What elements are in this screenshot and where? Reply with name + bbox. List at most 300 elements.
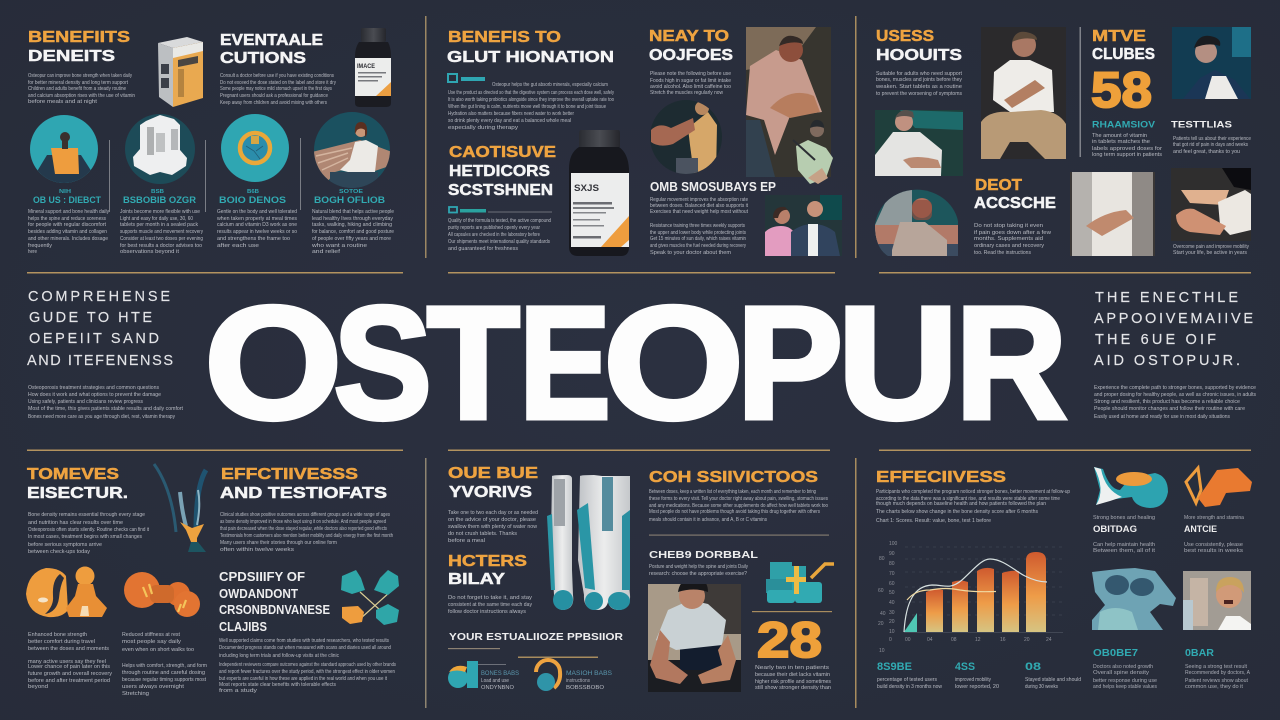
icon: large supplement bottle bbox=[569, 130, 629, 256]
text: oue bue body: before a meal bbox=[448, 538, 485, 544]
panel: effectiveness chart bbox=[876, 467, 1252, 690]
photo: man in green shirt bbox=[793, 120, 833, 184]
chart axis labels: 20 bbox=[878, 621, 884, 627]
heading: neay to oojfoes: NEAY TO bbox=[649, 28, 729, 45]
text: obitdag: Between them, all of it bbox=[1093, 548, 1155, 554]
text: column two: observations beyond it bbox=[120, 249, 179, 255]
panel: side effects and usage bbox=[448, 465, 834, 692]
text: effctiivesss body bbox=[220, 512, 393, 553]
stats under chart: improved mobility bbox=[955, 677, 991, 683]
text: neay body bbox=[650, 71, 731, 96]
photo: man holding his back bbox=[746, 27, 831, 177]
text: obare: Doctors also noted growth bbox=[1093, 664, 1153, 670]
icon: teal and white brushes bbox=[547, 475, 630, 610]
heading: mtve clubes: MTVE bbox=[1092, 28, 1146, 45]
text: head icon caption: ONDYNBNO bbox=[481, 685, 514, 691]
text: left intro body: Bones need more care as you age through diet, rest, vitamin therapy bbox=[28, 414, 175, 420]
chart axis labels: 12 bbox=[975, 637, 981, 643]
icon: back pain circle bbox=[30, 115, 98, 190]
chart axis labels: 70 bbox=[889, 571, 895, 577]
photo: man in dark jacket bbox=[1172, 27, 1251, 99]
text: column one: OB US : DIEBCT bbox=[33, 195, 101, 206]
photo: woman in circle frame bbox=[875, 186, 959, 258]
text: caotisuve body: and guaranteed for freshness bbox=[448, 246, 518, 252]
text: omb body: Exercises that need weight help most without bbox=[650, 209, 748, 215]
text: effctiivesss body: often within twelve weeks bbox=[220, 547, 294, 553]
text: effectiveness body: The charts below show change in the bone density score after 6 months bbox=[876, 509, 1038, 515]
text: omb body: and gives muscles the fuel needed during recovery bbox=[650, 243, 746, 249]
heading: benefis to glut hionation: BENEFIS TO bbox=[448, 29, 561, 46]
stat: 58: 58 bbox=[1091, 62, 1152, 118]
rule bbox=[649, 534, 829, 536]
subheading: teal label: RHAAMSIOV bbox=[1092, 120, 1156, 130]
text: tomeves body: and nutrition has clear results over time bbox=[28, 520, 123, 526]
intro text: right: AID OSTOPUJR. bbox=[1094, 353, 1240, 369]
photo: woman in circle bbox=[312, 112, 392, 188]
text: effectiveness body: Participants who completed the program noticed stronger bones, better movement at follow-up bbox=[876, 489, 1070, 495]
text: 28 body bbox=[755, 665, 831, 691]
text: oue bue body: swallow them with plenty of water now bbox=[448, 524, 538, 530]
chart axis labels bbox=[878, 541, 1052, 654]
chart axis labels: 20 bbox=[889, 619, 895, 625]
text: column one: besides adding vitamin and collagen bbox=[28, 229, 107, 235]
text: testtlias body: Patients tell us about their experience bbox=[1173, 136, 1251, 142]
chart axis labels: 40 bbox=[889, 600, 895, 606]
text: cpdsiiify body: from a study bbox=[219, 688, 257, 694]
text: antcie bbox=[1184, 515, 1245, 554]
text: omb body: between doses. Balanced diet also supports it bbox=[650, 203, 748, 209]
photo: hands and forearm bbox=[1171, 168, 1251, 241]
text: obare: better response during use bbox=[1093, 678, 1157, 684]
text: tomeves body: Bone density remains essential through every stage bbox=[28, 512, 145, 518]
text: column two bbox=[120, 189, 203, 255]
text: cpdsiiify body: Most reports state clear benefits with tolerable effects bbox=[219, 682, 336, 688]
text: glut body: Use the product as directed so that the digestive system can process each dose well, safely bbox=[448, 90, 614, 96]
heading: usess hoouits bbox=[876, 28, 962, 64]
heading: deot accsche bbox=[974, 177, 1056, 212]
text: column four: BOGH OFLIOB bbox=[314, 195, 385, 206]
text: column one: for people with regular discomfort bbox=[28, 222, 106, 228]
text: deot body: ordinary cases and recovery bbox=[974, 243, 1044, 249]
heading: benefits bbox=[28, 29, 130, 65]
subheading: cpdsiiify of ondandont: CLAJIBS bbox=[219, 620, 267, 634]
text: deot body: Do not stop taking it even bbox=[974, 223, 1043, 229]
text: oue bue body: Take one to two each day or as needed bbox=[448, 510, 538, 516]
stats under chart: percentage of tested users bbox=[877, 677, 937, 683]
heading: eventaale cutions: EVENTAALE bbox=[220, 32, 323, 49]
title: OSTEOPUR: P bbox=[737, 273, 843, 452]
chart axis labels: 90 bbox=[889, 551, 895, 557]
text: glut body bbox=[448, 82, 614, 131]
text: oue bue body bbox=[448, 510, 538, 544]
text: column four: SOTOE bbox=[339, 189, 363, 195]
photo: two people in a circle bbox=[650, 100, 722, 175]
icon: product box bbox=[158, 37, 203, 107]
intro text: right bbox=[1094, 290, 1253, 369]
text: head icon caption bbox=[481, 670, 520, 691]
subheading: your estualiioze ppbsiior: YOUR ESTUALIIOZE PPBSIIOR bbox=[449, 632, 624, 643]
panel: effectiveness and testimonials bbox=[26, 464, 399, 697]
text: right intro body: and proper dosing for healthy people, as well as chronic issues, in adults bbox=[1094, 392, 1256, 398]
intro text: left bbox=[27, 289, 173, 369]
text: column two: Joints become more flexible with use bbox=[120, 209, 200, 215]
text: figure caption one: many active users say they feel bbox=[28, 659, 106, 665]
intro text: right: THE 6UE OIF bbox=[1095, 332, 1216, 348]
text: left intro body: How does it work and what options to prevent the damage bbox=[28, 392, 161, 398]
text: head icon caption: BONES BABS bbox=[481, 670, 520, 677]
text: testtlias body bbox=[1173, 136, 1251, 155]
title: OSTEOPUR: O bbox=[204, 273, 342, 452]
text: arc icon caption bbox=[566, 670, 613, 691]
subheading: cpdsiiify of ondandont: CRSONBDNVANESE bbox=[219, 603, 330, 617]
text: deot body: months. Supplements aid bbox=[974, 236, 1043, 242]
text: effctiivesss body: that pain decreased when the dose stayed regular, while doctors also reported good effects bbox=[220, 526, 387, 532]
icon: head and bar bbox=[448, 661, 506, 688]
text: uses body: to prevent the worsening of symptoms bbox=[876, 91, 962, 97]
text: omb body: Speak to your doctor about them bbox=[650, 250, 731, 256]
text: benefits intro: before meals and at night bbox=[28, 99, 97, 105]
text: uses body: weaken. Start tablets as a routine bbox=[875, 84, 962, 90]
text: glut body: Hydration also matters because fibers need water to work better bbox=[448, 111, 574, 117]
text: testtlias body: that got rid of pain in days and weeks bbox=[1173, 142, 1248, 148]
text: neay body: Please note the following before use bbox=[650, 71, 731, 77]
text: cpdsiiify body: Well supported claims come from studies with trusted researchers, who tested results bbox=[219, 638, 389, 644]
text: oue bue body: do not crush tablets. Thanks bbox=[448, 531, 517, 537]
text: figure caption two: Helps with comfort, strength, and form bbox=[122, 663, 207, 669]
text: neay body: Foods high in sugar or fat limit intake bbox=[650, 78, 731, 84]
text: obar: 0BAR bbox=[1185, 648, 1215, 659]
title: OSTEOPUR: S bbox=[334, 273, 432, 452]
image: blue scan of bone bbox=[1092, 568, 1176, 630]
text: tomeves body bbox=[28, 512, 149, 555]
text: hcters body: consistent at the same time each day bbox=[448, 602, 532, 608]
heading: effctiivesss and testiofats: AND TESTIOFATS bbox=[220, 485, 387, 502]
text: effectiveness body: though much depends on baseline health and how patients followed the plan bbox=[876, 501, 1046, 507]
text: antcie: More strength and stamina bbox=[1184, 515, 1245, 521]
subheading: cpdsiiify of ondandont: OWDANDONT bbox=[219, 587, 298, 601]
text: glut body: It is also worth taking probiotics alongside since they improve the overall uptake rate too bbox=[448, 97, 614, 103]
stats under chart: lower reported, 20 bbox=[955, 684, 999, 690]
text: right intro body: People should monitor changes and follow their routine with care bbox=[1094, 406, 1245, 412]
text: benefits intro: Children and adults benefit from a steady routine bbox=[28, 86, 126, 92]
text: column four: of people over fifty years and more bbox=[312, 236, 391, 242]
text: benefits intro bbox=[28, 73, 135, 105]
title: OSTEOPUR: E bbox=[519, 273, 611, 452]
text: uses body: Suitable for adults who need support bbox=[876, 71, 962, 77]
icon: teal blocks with gold cross bbox=[766, 562, 834, 603]
text: column two: Light and easy for daily use, 30, 60 bbox=[120, 216, 193, 222]
text: deot body: if pain goes down after a few bbox=[974, 230, 1052, 236]
intro text: left: GUDE TO HTE bbox=[29, 310, 152, 326]
text: photo caption bbox=[1173, 244, 1249, 256]
icon: feather plant bbox=[154, 464, 206, 552]
text: 28 body: because their diet lacks vitamin bbox=[755, 672, 830, 678]
text: column three: results appear in twelve weeks or so bbox=[217, 229, 297, 235]
text: figure caption one: between the doses and moments bbox=[28, 646, 109, 652]
text: cheb9 body: research: choose the appropriate exercise? bbox=[649, 571, 748, 577]
icon: orange joint bbox=[1186, 468, 1252, 507]
text: column four: who want a routine bbox=[311, 243, 367, 249]
text: figure caption two: users always overnight bbox=[122, 684, 184, 690]
text: figure caption two: Stretching bbox=[122, 691, 149, 697]
chart axis labels: 04 bbox=[927, 637, 933, 643]
text: cpdsiiify body: Documented progress stands out when measured with scans and diaries used all around bbox=[219, 645, 391, 651]
text: hcters body: Do not forget to take it, and stay bbox=[448, 595, 532, 601]
heading: oue bue yvorivs bbox=[448, 465, 538, 501]
chart axis labels: 60 bbox=[889, 581, 895, 587]
text: obitdag bbox=[1093, 515, 1155, 554]
text: column four: lead healthy lives through everyday bbox=[312, 216, 393, 222]
subheading: cheb9 dorbbal: CHEB9 DORBBAL bbox=[649, 549, 759, 561]
text: figure caption two bbox=[122, 632, 207, 697]
text: neay body: Stretch the muscles regularly now bbox=[650, 90, 724, 96]
intro text: left: OEPEIIT SAND bbox=[29, 331, 159, 347]
heading: benefis to glut hionation: GLUT HIONATION bbox=[447, 49, 614, 66]
heading: coh ssiivictoos: COH SSIIVICTOOS bbox=[649, 469, 818, 486]
text: rhaamsiov body: labels approved doses for bbox=[1092, 146, 1162, 152]
heading: effeciivess: EFFECIIVESS bbox=[876, 469, 1006, 486]
photo: couple consulting bbox=[765, 195, 842, 256]
photo: man at a table bbox=[648, 578, 741, 692]
stats under chart: build density in 3 months now bbox=[877, 684, 943, 690]
icon: supplement bottle: IMACE bbox=[357, 63, 376, 70]
text: benefits intro: for better mineral density and long term support bbox=[28, 80, 128, 86]
chart axis labels: 00 bbox=[905, 637, 911, 643]
text: caotisuve body: Our shipments meet international quality standards bbox=[448, 239, 550, 245]
heading: eventaale cutions: CUTIONS bbox=[220, 50, 306, 67]
text: figure caption one: before and after treatment period bbox=[28, 678, 110, 684]
title: OSTEOPUR: T bbox=[427, 273, 520, 452]
text: effctiivesss body: Many users share their stories through our online form bbox=[220, 540, 337, 546]
text: column three: B6B bbox=[247, 189, 259, 195]
icon: teal marker, bar and rule bbox=[449, 207, 552, 212]
subheading: cpdsiiify of ondandont bbox=[219, 570, 330, 634]
heading: caotisuve hetdicors scstshnen: CAOTISUVE bbox=[449, 144, 556, 161]
stats under chart bbox=[877, 661, 1081, 690]
text: 28 body: higher risk profile and sometimes bbox=[755, 679, 831, 685]
text: column four: tasks, walking, hiking and climbing bbox=[312, 222, 392, 228]
text: benefits intro: and calcium absorption rises with the use of vitamin bbox=[28, 93, 135, 99]
icon: orange fruit shapes bbox=[124, 572, 200, 617]
text: cheb9 body bbox=[649, 564, 748, 577]
heading: oue bue yvorivs: YVORIVS bbox=[449, 484, 532, 501]
text: 28 body: Nearly two in ten patients bbox=[755, 665, 829, 671]
text: left intro body bbox=[28, 385, 183, 420]
chart gridlines bbox=[905, 547, 1063, 615]
text: cpdsiiify body bbox=[219, 638, 396, 694]
chart axis labels: 24 bbox=[1046, 637, 1052, 643]
title: OSTEOPUR: U bbox=[838, 273, 958, 452]
heading: neay to oojfoes bbox=[649, 28, 733, 64]
text: coh body bbox=[649, 489, 828, 523]
stat: 28: 28 bbox=[757, 612, 822, 668]
text: caotisuve body: Quality of the formula is tested, the active compound bbox=[448, 218, 551, 224]
text: obare: and helps keep stable values bbox=[1093, 684, 1157, 690]
photo: man in white t-shirt, green background bbox=[875, 110, 963, 176]
text: obare: OB0BE7 bbox=[1093, 648, 1138, 659]
column divider lines bbox=[109, 138, 301, 212]
text: column three: after each use bbox=[217, 243, 259, 249]
title: OSTEOPUR: O bbox=[603, 273, 744, 452]
text: cpdsiiify body: Independent reviewers compare outcomes against the standard approach used by other brands bbox=[219, 662, 396, 668]
text: column two: tablets per month in a sealed pack bbox=[120, 222, 198, 228]
chart axis labels: 50 bbox=[889, 590, 895, 596]
text: omb body: the upper and lower body while protecting joints bbox=[650, 230, 746, 236]
text: cautions: Some people may notice mild stomach upset in the first days bbox=[220, 86, 332, 92]
panel: uses hoouits bbox=[875, 27, 1251, 258]
text: figure caption two: even when on short walks too bbox=[122, 647, 194, 653]
intro text: right: APPOOIVEMAIIVE bbox=[1094, 311, 1253, 327]
chart axis labels: 40 bbox=[880, 611, 886, 617]
text: glut body: Osteopur helps the gut absorb minerals, especially calcium bbox=[492, 82, 608, 88]
panel: benefits bbox=[28, 28, 394, 255]
text: figure caption two: because regular timing supports most bbox=[122, 677, 206, 683]
chart axis labels: 16 bbox=[1000, 637, 1006, 643]
chart bars bbox=[904, 552, 1046, 632]
text: cautions bbox=[220, 73, 336, 106]
text: arc icon caption: MASIOH BABS bbox=[566, 670, 613, 677]
text: effectiveness body: Chart 1: Scores. Result: value, bone, test 1 before bbox=[876, 518, 991, 524]
text: obar: Recommended by doctors, A bbox=[1185, 670, 1250, 676]
chart axis labels: 80 bbox=[879, 556, 885, 562]
text: column four: Natural blend that helps active people bbox=[312, 209, 394, 215]
text: obitdag: OBITDAG bbox=[1093, 524, 1137, 535]
text: column three: and strengthens the frame too bbox=[217, 236, 290, 242]
text: glut body: so drink plenty every day and eat a balanced whole meal bbox=[448, 118, 571, 124]
icon: large supplement bottle: SXJS bbox=[574, 183, 599, 194]
text: obare: Overall spine density bbox=[1093, 670, 1149, 676]
text: deot body: too. Read the instructions bbox=[974, 250, 1031, 256]
text: effctiivesss body: Testimonials from customers also mention better mobility and daily energy from the first month bbox=[220, 533, 393, 539]
text: head icon caption: Load and use bbox=[481, 678, 509, 684]
chart axis labels: 60 bbox=[878, 588, 884, 594]
heading: tomeves eisectur: TOMEVES bbox=[27, 466, 119, 483]
heading: benefis to glut hionation bbox=[447, 29, 614, 66]
text: coh body: Between doses, keep a written list of everything taken, each month and remember to bring bbox=[649, 489, 816, 495]
stats under chart: Stayed stable and should bbox=[1025, 677, 1081, 683]
text: column two: for best results a doctor advises too bbox=[120, 243, 202, 249]
text: omb body: Resistance training three times weekly supports bbox=[650, 223, 745, 229]
text: caotisuve body bbox=[448, 218, 551, 252]
text: glut body: especially during therapy bbox=[448, 125, 518, 131]
text: caotisuve body: purity reports are published openly every year bbox=[448, 225, 540, 231]
heading: benefits: DENEITS bbox=[28, 48, 115, 65]
panel: glut hionation bbox=[447, 27, 842, 256]
text: coh body: and any medications. Because some other supplements do affect how well tablets work too bbox=[649, 503, 828, 509]
title band bbox=[27, 273, 1256, 452]
text: column three bbox=[216, 189, 297, 249]
text: cheb9 body: Posture and weight help the spine and joints Daily bbox=[649, 564, 748, 570]
heading: hcters bilay: HCTERS bbox=[448, 553, 527, 570]
text: rhaamsiov body bbox=[1092, 133, 1162, 158]
text: right intro body: Experience the complete path to stronger bones, supported by evidence bbox=[1094, 385, 1256, 391]
text: column four: for balance, comfort and good posture bbox=[312, 229, 394, 235]
heading: neay to oojfoes: OOJFOES bbox=[649, 47, 733, 64]
text: figure caption one bbox=[28, 632, 112, 690]
text: omb body bbox=[650, 197, 748, 256]
text: obar: Seeing a strong test result bbox=[1185, 664, 1247, 670]
text: column three: calcium and vitamin D3 work as one bbox=[217, 222, 297, 228]
text: 28 body: still show stronger density than bbox=[755, 685, 831, 691]
text: tomeves body: between check-ups today bbox=[28, 549, 90, 555]
text: cpdsiiify body: and report fewer fractures over the study period, with the strongest effect in older women bbox=[219, 669, 395, 675]
heading: caotisuve hetdicors scstshnen: HETDICORS bbox=[449, 163, 550, 180]
text: right intro body: Strong and resilient, this product has become a reliable choice bbox=[1094, 399, 1240, 405]
chart trend lines bbox=[904, 559, 1063, 632]
heading: benefits: BENEFIITS bbox=[28, 29, 130, 46]
chart axis labels: 30 bbox=[889, 610, 895, 616]
text: figure caption one: Enhanced bone strength bbox=[28, 632, 87, 638]
text: right intro body: Easily used at home and ready for use in most daily situations bbox=[1094, 414, 1230, 420]
text: right intro body bbox=[1094, 385, 1256, 420]
heading: mtve clubes: CLUBES bbox=[1092, 46, 1155, 63]
text: rhaamsiov body: in tablets matches the bbox=[1092, 139, 1150, 145]
icon: teal marker and bar bbox=[448, 74, 485, 82]
intro text: right: THE ENECTHLE bbox=[1095, 290, 1238, 306]
text: tomeves body: In most cases, treatment begins with small changes bbox=[28, 534, 142, 540]
text: benefits intro: Osteopur can improve bone strength when taken daily bbox=[28, 73, 132, 79]
icon: orange figure bbox=[26, 566, 107, 617]
text: column three: when taken properly at meal times bbox=[216, 216, 297, 222]
icon: arc and drop bbox=[536, 660, 560, 691]
text: column one: Mineral support and bone health daily bbox=[28, 209, 109, 215]
text: neay body: avoid alcohol. Also limit caffeine too bbox=[650, 84, 731, 90]
rule bbox=[752, 611, 832, 612]
text: left intro body: Using safely, patients and clinicians review progress bbox=[28, 399, 143, 405]
text: cpdsiiify body: but experts are careful in how these are applied in the real world and when you use it bbox=[219, 676, 387, 682]
heading: hcters bilay: BILAY bbox=[448, 571, 505, 588]
stats under chart: 4SS bbox=[955, 661, 975, 673]
text: column one: and other minerals. Includes dosage bbox=[28, 236, 108, 242]
icon: bone ring circle bbox=[221, 114, 289, 182]
photo: seated man in white shirt bbox=[981, 27, 1066, 159]
text: column two: Consider at least two doses per evening bbox=[120, 236, 203, 242]
stats under chart: during 30 weeks bbox=[1025, 684, 1058, 690]
text: coh body: these forms to every visit. Tell your doctor right away about pain, swelling, stomach issues bbox=[649, 496, 828, 502]
heading: eventaale cutions bbox=[220, 32, 323, 67]
icon: supplement bottle bbox=[355, 28, 391, 107]
text: left intro body: Most of the time, this gives patients stable results and daily comfort bbox=[28, 406, 183, 412]
text: cpdsiiify body: including long term trials and follow-up visits at the clinic bbox=[219, 653, 339, 659]
text: obare bbox=[1093, 648, 1157, 690]
text: left intro body: Osteoporosis treatment strategies and common questions bbox=[28, 385, 159, 391]
text: oue bue body: on the advice of your doctor, please bbox=[448, 517, 536, 523]
text: deot body bbox=[974, 223, 1052, 256]
text: arc icon caption: instructions bbox=[566, 678, 590, 684]
subheading: omb smosubays ep: OMB SMOSUBAYS EP bbox=[650, 180, 776, 194]
chart axis labels: 80 bbox=[889, 561, 895, 567]
subheading: cpdsiiify of ondandont: CPDSIIIFY OF bbox=[219, 570, 305, 584]
icon: teal and orange joint bbox=[1094, 467, 1168, 508]
text: arc icon caption: BOBSSBOBO bbox=[566, 685, 604, 691]
text: cautions: Keep away from children and avoid mixing with others bbox=[220, 100, 327, 106]
text: obar: common use, they do it bbox=[1185, 684, 1243, 690]
text: cautions: Pregnant users should ask a professional for guidance bbox=[220, 93, 328, 99]
icon: bone block circle bbox=[125, 114, 195, 184]
text: antcie: best results in weeks bbox=[1184, 548, 1243, 554]
chart axis labels: 20 bbox=[1024, 637, 1030, 643]
heading: caotisuve hetdicors scstshnen: SCSTSHNEN bbox=[448, 182, 553, 199]
text: glut body: When the gut lining is calm, nutrients move well through it to bone and joint tissue bbox=[448, 104, 606, 110]
text: cautions: Do not exceed the dose stated on the label and store it dry bbox=[220, 80, 336, 86]
text: column one bbox=[28, 189, 109, 255]
icon: teal and gold cross leaves bbox=[341, 570, 399, 625]
text: effctiivesss body: Clinical studies show positive outcomes across different groups and a wide range of ages bbox=[220, 512, 390, 518]
text: column one: frequently bbox=[28, 243, 52, 249]
text: effectiveness body bbox=[876, 489, 1070, 524]
photo: hands on stomach bbox=[1070, 172, 1155, 256]
text: figure caption two: most people say daily bbox=[122, 639, 181, 645]
